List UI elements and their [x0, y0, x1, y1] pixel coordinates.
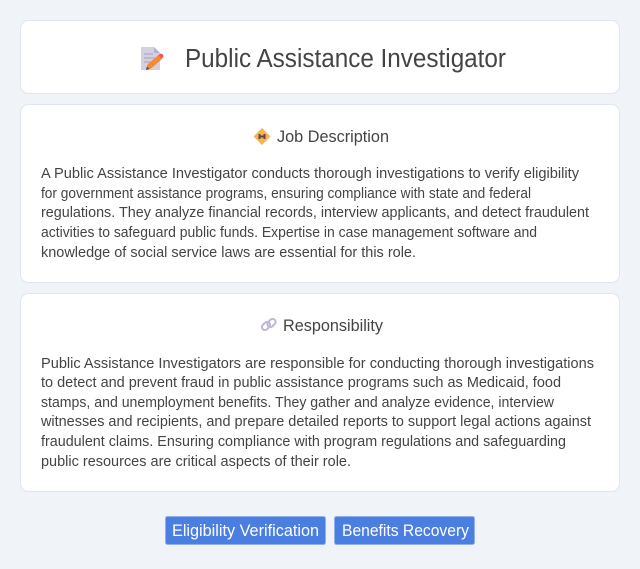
text block: job description: knowledge of social service laws are essential for this role.	[41, 245, 416, 261]
text block: responsibility: stamps, and unemployment benefits. They gather and analyze evidence, interview	[41, 395, 555, 411]
text block: responsibility: witnesses and recipients, and prepare detailed reports to support legal actions against	[40, 414, 591, 430]
text block: job description: for government assistance programs, ensuring compliance with state and federal	[41, 186, 531, 202]
panel: responsibility	[20, 294, 620, 492]
tag: benefits recovery: Benefits Recovery	[342, 522, 470, 540]
text block: responsibility	[40, 356, 594, 470]
text block: responsibility: public resources are critical aspects of their role.	[41, 454, 351, 470]
panel: title	[20, 20, 620, 94]
tag: eligibility verification: Eligibility Verification	[172, 522, 319, 540]
icon: diamond sign	[254, 128, 270, 145]
icon: document with pencil	[141, 47, 164, 70]
text block: job description: activities to safeguard public funds. Expertise in case management software and	[41, 225, 537, 241]
tag: benefits recovery	[334, 516, 474, 544]
text block: job description: A Public Assistance Investigator conducts thorough investigations to verify eligibility	[41, 166, 580, 182]
text block: responsibility: Public Assistance Investigators are responsible for conducting thorough investigations	[41, 356, 594, 372]
text block: responsibility: to detect and prevent fraud in public assistance programs such as Medicaid, food	[41, 375, 561, 391]
heading: job description: Job Description	[277, 128, 389, 146]
text block: job description: regulations. They analyze financial records, interview applicants, and detect fraudulent	[41, 205, 589, 221]
title text: Public Assistance Investigator	[185, 45, 506, 73]
text block: responsibility: fraudulent claims. Ensuring compliance with program regulations and safeguarding	[41, 434, 566, 450]
tag: eligibility verification	[166, 516, 326, 544]
heading: responsibility: Responsibility	[283, 317, 384, 335]
panel: job description	[20, 104, 620, 282]
icon: link	[261, 318, 277, 331]
text block: job description	[41, 166, 589, 261]
